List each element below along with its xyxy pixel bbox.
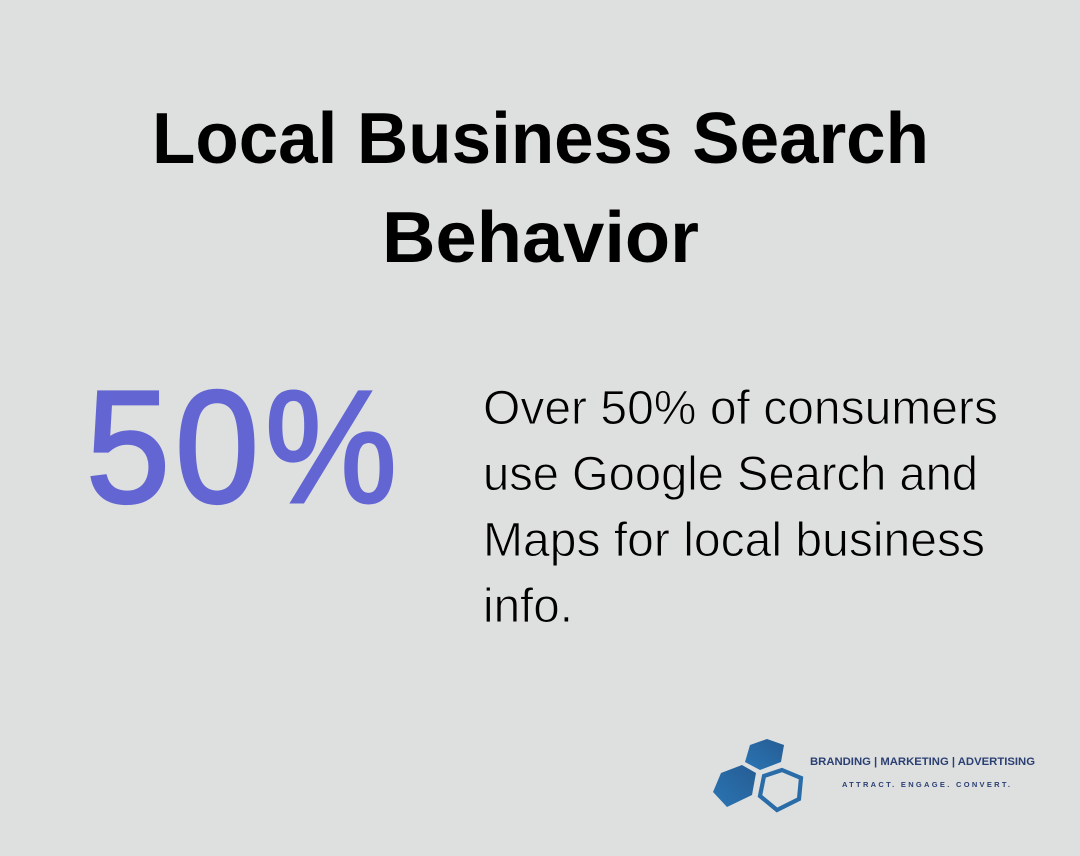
title: [152, 99, 929, 278]
description text: Maps for local business: [483, 514, 985, 567]
big stat: 50%: %: [265, 357, 397, 536]
title: Local Business Search: [152, 99, 929, 179]
big stat: 50%: [86, 357, 397, 536]
icon: outlined hexagon: [760, 770, 801, 810]
description text: Over 50% of consumers: [483, 382, 998, 435]
description text: info.: [483, 580, 573, 633]
title: Behavior: [382, 198, 699, 278]
description text: [483, 382, 998, 633]
logo headline: BRANDING | MARKETING | ADVERTISING: [810, 756, 1035, 768]
icon: left filled hexagon: [713, 765, 756, 807]
description text: use Google Search and: [483, 448, 978, 501]
logo: [713, 739, 1035, 810]
icon: top filled hexagon: [745, 739, 784, 770]
logo tagline: ATTRACT. ENGAGE. CONVERT.: [842, 780, 1010, 789]
big stat: 50%: 5: [86, 357, 170, 536]
big stat: 50%: 0: [175, 357, 259, 536]
